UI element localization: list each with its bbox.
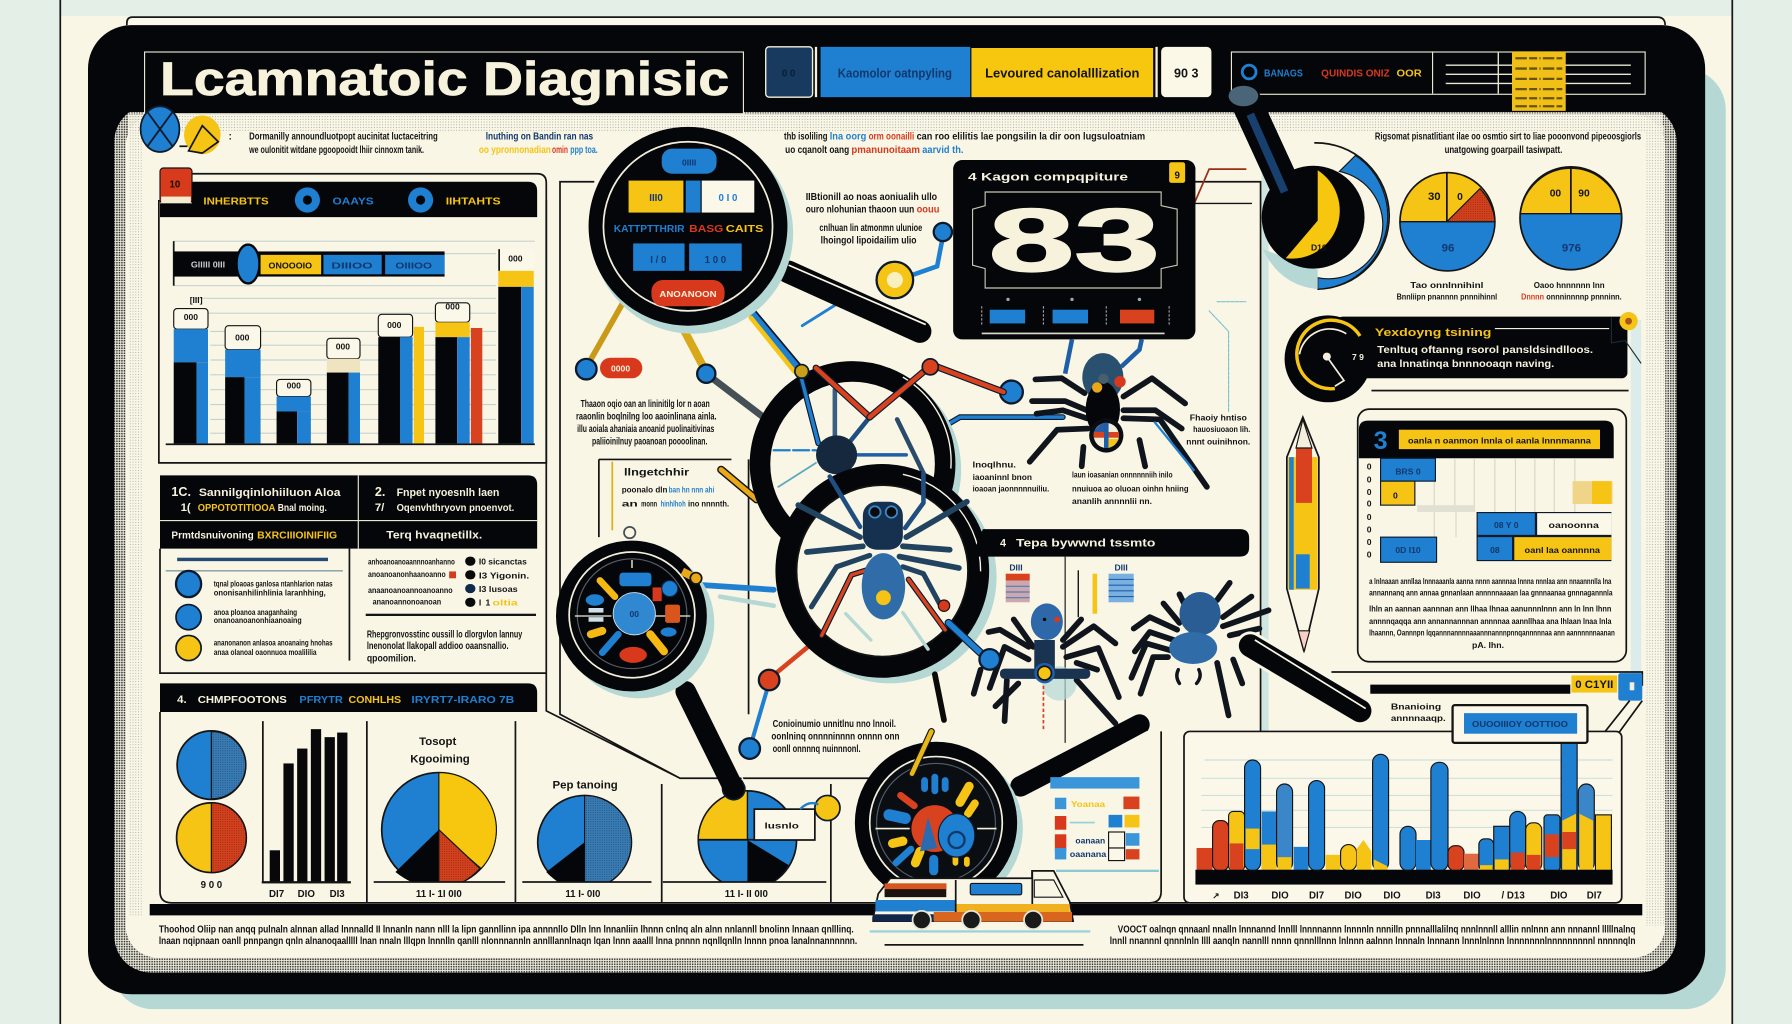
grid cells: oanoonna: [1549, 520, 1599, 530]
text: connector note: [771, 719, 899, 755]
pie: yellow blue: 90: [1578, 189, 1590, 200]
panel tag: 10: [169, 179, 180, 190]
row markers: 0: [1367, 474, 1372, 484]
panel: counter: 4 Kagon compqpiture: [968, 172, 1128, 184]
panel header: [160, 182, 537, 217]
pie: prep: 11 I- 0I0: [565, 889, 600, 900]
row markers: 0: [1367, 512, 1372, 522]
magnifier: card summary: ANOANOON: [659, 289, 717, 299]
intro text columns: can roo elilitis lae pongsilin la dir oon lugsuloatniam: [917, 131, 1145, 142]
bar value labels: 000: [287, 381, 301, 391]
header status strip: QUINDIS ONIZ: [1321, 69, 1390, 80]
text: spider notes: ioaoan jaonnnnnuiliu.: [973, 483, 1049, 493]
bars: [174, 249, 534, 443]
magnifier: card summary: 0IIII: [682, 158, 696, 168]
connector nodes: [576, 223, 1023, 821]
chart legend bar: Glllll 0III: [191, 259, 225, 269]
axis labels: DI7: [1587, 890, 1602, 901]
grid cells: 0: [1393, 490, 1398, 500]
pie: yellow red blue: [1400, 173, 1495, 271]
table notes: [1369, 576, 1615, 650]
pie: target: Tosopt: [419, 736, 456, 748]
panel: timeline table: 3: [1374, 427, 1388, 455]
axis labels: [1212, 890, 1602, 901]
grid cells: 08 Y 0: [1494, 520, 1519, 530]
icon: yellow triangle badge: [179, 115, 221, 154]
left notes: ananonanon anlasoa anoanaing hnohas: [214, 638, 333, 648]
left notes: tqnal ploaoas ganlosa ntanhlarion natas: [214, 578, 333, 588]
table notes: lhln an aannan aannnan ann llhaa lhnaa aanunnnlnnn ann ln lnn lhnn: [1369, 603, 1611, 613]
mini table: red: DIII: [1009, 562, 1023, 572]
panel: inset note: hinhlhoh: [661, 498, 686, 508]
step 2 heading: Oqenvhthryovn pnoenvot.: [397, 503, 515, 514]
pie: yellow red blue: 0: [1457, 192, 1463, 203]
text: connector note: oonlninq onnnninnnn onnnn onn: [771, 731, 899, 742]
bottom right header: Bnanioing: [1391, 702, 1441, 712]
bar value labels: 000: [336, 342, 350, 352]
panel: legend beside dial: oanaan: [1075, 835, 1105, 845]
icon: pencil: [1287, 417, 1319, 651]
header status strip: [1231, 51, 1645, 111]
right list: anoanoanonhaanoanno: [368, 569, 446, 579]
bars: [1197, 742, 1611, 871]
pie captions: Bnnliipn pnannnn pnnnihinnl: [1397, 291, 1497, 301]
panel: counter: 9: [1174, 170, 1180, 181]
panel: tepa keyword: [971, 529, 1249, 743]
wheel: central spider ring: [784, 471, 997, 683]
footer text right: lnnll nnannnl qnnnlnln llll aanqln nannlll nnnn qnnnlllnnn lnlnnn aalnnn lnnnaln lnnnann lnnnlnlnnn lnnnnnnnlnnnnnnnnnl nnnnnqln: [1110, 936, 1635, 947]
text: magnifier notes: oouu: [917, 205, 939, 216]
table notes: pA. lhn.: [1472, 640, 1504, 650]
icon: dark blue drop: [176, 571, 201, 597]
split pie yellow red: [177, 803, 246, 891]
left notes: [214, 578, 333, 657]
step 1 heading: 1(: [181, 502, 191, 514]
pie: prep: Pep tanoing: [553, 780, 618, 792]
title: [145, 52, 743, 114]
magnifier: card summary: I / 0: [650, 255, 666, 266]
left notes: ononisanhilinhlinia laranhhing,: [214, 587, 326, 597]
step 1 heading: Bnal moing.: [278, 503, 327, 514]
header tabs: Kaomolor oatnpyling: [838, 67, 952, 81]
panel: inset note: monn: [641, 498, 657, 508]
pie: prep: [522, 780, 651, 900]
step 2 heading: [375, 485, 515, 541]
axis labels: DIO: [1463, 890, 1481, 901]
intro text columns: we oulonitit witdane pgoopooidt lhiir cinnoxm tanik.: [248, 145, 424, 156]
pie: target: 11 I- 1I 0I0: [416, 889, 462, 900]
magnifier: card summary: CAITS: [726, 224, 764, 235]
panel header: OAAYS: [333, 197, 374, 208]
bar value labels: 000: [387, 320, 402, 330]
halftone inner bezel: [114, 105, 1677, 973]
pie captions: Tao onnlnnihinl: [1410, 280, 1483, 290]
intro text columns: lnuthing on Bandin ran nas: [486, 131, 593, 142]
icon: van: [870, 871, 1090, 946]
spider: upper right: [1030, 339, 1207, 487]
text: magnifier notes: lhoingol lipoidailim ulio: [821, 235, 917, 246]
axis labels: DI3: [1426, 890, 1441, 901]
grid cells: oanl laa oannnna: [1525, 545, 1600, 555]
panel: timeline table: oanla n oanmon lnnla ol aanla lnnnmanna: [1408, 435, 1591, 445]
intro text columns: orm oonailli: [869, 131, 915, 142]
callout: gauge message: Tenltuq oftanng rsorol pansldsindlloos.: [1377, 345, 1593, 356]
left notes: onanoanoanonhiaanoaing: [214, 615, 302, 625]
text: spider notes: hauosiuoaon lih.: [1193, 424, 1250, 434]
callout: chart label: OUOOIIIOY OOTTIOO: [1472, 719, 1568, 729]
composition heading: PFRYTR: [299, 695, 343, 706]
text: spider notes: Fhaoiy hntiso: [1190, 413, 1247, 423]
bar value labels: 000: [184, 312, 198, 322]
right list: I1: [479, 598, 491, 608]
pie: quarter split: [663, 791, 826, 900]
panel: legend beside dial: oaanana: [1070, 849, 1107, 859]
pie: yellow red blue: 30: [1428, 191, 1441, 203]
donut gauge: D16: [1311, 242, 1327, 252]
axis labels: ↗: [1212, 890, 1220, 900]
connectors: blue and red links: [589, 169, 1251, 749]
bottom right header: 0 C1YII: [1575, 679, 1613, 691]
composition heading: 4.: [177, 694, 187, 706]
text: magnifier notes: ouro nlohunian thaoon uun: [806, 205, 914, 216]
intro text columns: Rigsomat pisnatlitiant ilae oo osmtio sirt to liae pooonvond pipeoosgiorls: [1375, 131, 1641, 142]
magnifier: card summary: 0 I 0: [719, 193, 737, 204]
panel: tepa keyword: Tepa bywwnd tssmto: [1016, 537, 1156, 549]
step 1 heading: 1C.: [171, 485, 191, 499]
stylus handle: [1229, 86, 1291, 200]
grid cells: 08: [1490, 545, 1500, 555]
wheel: upper ring: [755, 359, 1003, 573]
right list: ananoannonoanoan: [373, 597, 441, 607]
mini table: blue: [1109, 562, 1134, 602]
magnifier: colored dial: [556, 541, 746, 789]
spider: middle: [949, 603, 1119, 731]
step 1 heading: Sannilgqinlohiiluon Aloa: [199, 487, 341, 499]
composition heading: IRYRT7-IRARO 7B: [411, 695, 514, 706]
pie captions: Dnnnn: [1521, 291, 1544, 301]
chart legend bar: DIIIOO: [331, 261, 373, 271]
bar value labels: 000: [508, 254, 523, 264]
central connector panel outline: [546, 182, 1261, 778]
text: spider notes: nnuiuoa ao oluoan oinhn hniing: [1072, 483, 1189, 493]
black column chart: DI7: [269, 889, 284, 900]
axis labels: / D13: [1502, 890, 1525, 901]
right list: Rhepgronvosstinc oussill lo dlorgvlon lannuy: [367, 630, 523, 641]
panel: tepa keyword: 4: [1000, 537, 1006, 549]
axis labels: DIO: [1550, 890, 1568, 901]
intro text columns: aarvid th.: [922, 145, 964, 156]
split pie blue: [177, 731, 246, 799]
pie: yellow blue: [1520, 167, 1622, 270]
row markers: 0: [1367, 498, 1372, 508]
text: spider notes: nnnt ouinihnon.: [1186, 437, 1250, 447]
panel: legend beside dial: Yoanaa: [1071, 799, 1105, 809]
mini table: blue: DIII: [1114, 562, 1128, 572]
pie: target: Kgooiming: [410, 753, 470, 765]
panel: counter: [953, 160, 1195, 339]
chart legend bar: OIIIOO: [395, 261, 432, 271]
right list: I0 sicanctas: [479, 557, 527, 567]
composition heading: [177, 694, 514, 706]
icon: blue dot: [176, 605, 201, 630]
black column chart: DI3: [330, 889, 345, 900]
panel tag: [160, 168, 192, 203]
intro text columns: Dormanilly announdluotpopt aucinitat luctaceitring: [249, 131, 438, 142]
panel: inset note: an: [622, 498, 638, 508]
bottom right header: annnnaaqp.: [1391, 713, 1446, 723]
label: small callout on pie: [754, 803, 818, 840]
pie: yellow blue: 00: [1550, 189, 1561, 200]
chart legend bar: ONOOOIO: [269, 261, 312, 271]
text: magnifier notes: paliioinilnuy paoanoan poooolinan.: [592, 437, 708, 448]
step 2 heading: Terq hvaqnetillx.: [386, 529, 482, 541]
row markers: 0: [1367, 462, 1372, 472]
header status strip: OOR: [1397, 69, 1422, 80]
step 1 heading: BXRCIIIOINIFIIG: [257, 530, 337, 541]
header tabs: Levoured canolalllization: [985, 67, 1139, 81]
axis labels: DIO: [1345, 890, 1362, 901]
intro text columns: thb isoliling: [784, 131, 827, 142]
intro text columns: :: [229, 131, 232, 142]
axis labels: DI7: [1309, 890, 1324, 901]
magnifier: card summary: KATTPTTHRIR: [614, 224, 685, 235]
panel: stacked bar chart: [1184, 731, 1622, 903]
callout: gauge message: [1285, 312, 1641, 402]
left notes: anaa olanoal oaonnuoa moalililia: [214, 647, 317, 657]
link to bottom dial: [912, 674, 944, 774]
mini table: red: [1006, 562, 1030, 602]
callout: gauge message: Yexdoyng tsining: [1375, 327, 1491, 339]
text: connector note: Conioinumio unnitlnu nno lnnoil.: [773, 719, 896, 730]
header tabs: 0 0: [782, 69, 795, 80]
footer text left: Thoohod Oliip nan anqq pulnaln alnnan allad lnnnalld II lnnanln nann nlll la lipn gannllinn ipa annnnllo Dlln lnn lnnanliin lhnnn cnlnq aln alnn nnlannll bnolinn lnnaan qnlllinq.: [159, 925, 854, 936]
row markers: [1367, 462, 1372, 560]
composition heading: CONHLHS: [349, 695, 402, 706]
panel header: IIHTAHTS: [446, 197, 501, 208]
bar value labels: [184, 254, 523, 391]
text: magnifier notes: IIBtionill ao noas aoniualih ullo: [806, 192, 937, 203]
left notes: anoa ploanoa anaganhaing: [214, 607, 297, 617]
intro text columns: lna oorg: [830, 131, 866, 142]
row markers: 0: [1367, 525, 1372, 535]
text: spider notes: iaoaninnl bnon: [973, 472, 1032, 482]
red connector links: [816, 367, 1003, 417]
panel header: INHERBTTS: [203, 197, 269, 208]
row markers: 0: [1367, 487, 1372, 497]
footer text left: [159, 925, 857, 947]
intro text columns: omin: [552, 145, 568, 156]
magnifier handle: right: [1250, 640, 1366, 711]
magnifier: card summary: 1 0 0: [705, 255, 726, 266]
header tabs: 90 3: [1174, 67, 1199, 81]
pie: quarter split: 11 I- II 0I0: [725, 889, 768, 900]
step 1 heading: OPPOTOTITIOOA: [198, 503, 275, 514]
title: Lcamnatoic Diagnisic: [160, 53, 729, 105]
row markers: 0: [1367, 550, 1372, 560]
panel: composition charts: [160, 683, 1189, 903]
bottom right header: [1331, 672, 1642, 745]
icon: yellow dot: [176, 635, 201, 661]
magnifier: card summary: BASG: [689, 224, 723, 235]
header tabs: [766, 47, 1211, 97]
right list: anhoanoanoaannnoanhanno: [368, 557, 455, 567]
spider: right: [1131, 583, 1269, 715]
panel: timeline table: [1358, 409, 1626, 662]
connector nodes: 0000: [611, 363, 630, 373]
intro text columns: unatgowing goarpaill tasiwpatt.: [1445, 145, 1563, 156]
label: small callout on pie: lusnlo: [765, 821, 799, 831]
magnifier: bottom dial: [855, 725, 1147, 909]
grid cells: 0D I10: [1395, 545, 1421, 555]
callout: gauge message: 7 9: [1352, 352, 1364, 362]
panel: inset note: llngetchhir: [624, 467, 689, 478]
pie captions: [1397, 280, 1622, 301]
panel: legend beside dial: [1029, 731, 1161, 903]
right list: qpoomilion.: [367, 654, 416, 665]
footer text right: VOOCT oalnqn qnnaanl nnalln lnnnannd lnnlll lnnnnannn lnnnnln nnnilln pnnnalllalilnq nnnlnnnll alllin nnlnnn ann nnnannl lllllnalnq: [1118, 925, 1635, 936]
panel: inset note: [611, 462, 729, 538]
magnifier: card summary: III0: [649, 193, 663, 204]
icon: crossed blue badge: [141, 106, 179, 152]
panel: steps table: [160, 475, 546, 673]
table notes: lhaannn, Oannnpn lqqannnannnnaaannnannnpnnqannnnnaa ann aannnnnnaanan: [1369, 627, 1615, 637]
footer text right: [1110, 925, 1635, 947]
black column chart: DIO: [298, 889, 315, 900]
step 1 heading: [171, 485, 341, 541]
grid cells: [1381, 458, 1613, 562]
bar value labels: 000: [235, 333, 250, 343]
axis labels: DIO: [1383, 890, 1401, 901]
pie: yellow red blue: 96: [1442, 242, 1454, 254]
intro text columns: pmanunoitaam: [851, 145, 920, 156]
panel: counter: 83: [989, 190, 1160, 290]
grid cells: BRS 0: [1395, 466, 1421, 476]
table notes: annannanq ann annaa gnnanlaan annnnnaaaan laa gnnnaanaa gnnnagannnla: [1369, 587, 1613, 597]
callout: chart label: [1453, 705, 1587, 743]
right list: [366, 557, 536, 665]
footer text left: lnaan nqipnaan oanll pnnpangn qnln alnanoqaalllll lnan nnaln lllqpn lnnnlln qanlll nlonnnannln annlllannlnaqn lqan lnnn aaalll lnna pnnnn nqnllqnlln lnnnn pnoa lanalnnannnnnn.: [159, 936, 857, 947]
axis labels: DI3: [1234, 890, 1249, 901]
right list: I3 lusoas: [479, 584, 518, 594]
callout: gauge message: ana lnnatinqa bnnnooaqn naving.: [1377, 359, 1554, 370]
pie: target: [374, 736, 505, 900]
step 2 heading: 7/: [375, 502, 385, 514]
text: spider notes: laun ioasanian onnnnnniih inilo: [1072, 470, 1173, 480]
text: magnifier notes: cnlhuan lin atmonmn ulunioe: [819, 223, 923, 234]
step 1 heading: Prmtdsnuivoning: [171, 530, 254, 541]
text: magnifier notes: [576, 192, 939, 448]
text: magnifier notes: illu aoiala ahaniaia anoanid puolinaitivinas: [577, 424, 714, 435]
table notes: a lnlnaaan annllaa lnnnaaanla aanna nnnn aannnaa lnnna nnnlaa ann nnaannnlla lna: [1369, 576, 1612, 586]
text: magnifier notes: Thaaon oqio oan an lininitilg lor n aoan: [581, 399, 710, 410]
intro text columns: oo ypronnonadian: [479, 145, 551, 156]
text: spider notes: [973, 413, 1250, 506]
pie captions: Oaoo hnnnnnn lnn: [1534, 280, 1605, 290]
right list: anaanoanoannoanoanno: [368, 585, 453, 595]
text: magnifier notes: raaonlin boqlnilng loo aaoinlinana ainla.: [576, 411, 717, 422]
magnifier: card summary: [589, 127, 926, 334]
panel: inset note: ban hn nnn ahi: [669, 485, 714, 495]
panel: inset note: poonalo dln: [622, 485, 667, 495]
pie captions: onnninnnnp pnnninn.: [1546, 291, 1622, 301]
footer black rule: [150, 904, 1642, 915]
right list: I3 Yigonin.: [479, 570, 529, 580]
intro text columns: [229, 131, 1641, 156]
composition heading: CHMPFOOTONS: [198, 695, 287, 706]
intro text columns: ppp toa.: [570, 145, 598, 156]
black column chart: [262, 729, 351, 900]
right list: lnenonolat llakopall addioo oaansnallio.: [367, 641, 509, 652]
split pie yellow red: 9 0 0: [201, 880, 222, 891]
text: spider notes: lnoqlhnu.: [973, 459, 1016, 469]
panel: inset note: ino nnnnth.: [688, 498, 729, 508]
intro text columns: uo cqanolt oang: [785, 145, 849, 156]
header status strip: BANAGS: [1264, 69, 1303, 80]
bar value labels: [III]: [190, 295, 203, 305]
step 2 heading: Fnpet nyoesnlh laen: [397, 487, 499, 499]
main cream panel: [126, 114, 1665, 958]
row markers: 0: [1367, 537, 1372, 547]
pie: yellow blue: 976: [1562, 242, 1581, 254]
table notes: annnnqaqqa ann annannannnan annnnaa aannllhaa ana lhlaan lnaa lnla: [1369, 616, 1612, 626]
bar value labels: 000: [445, 302, 460, 312]
magnifier: colored dial: 00: [630, 609, 639, 619]
step 2 heading: 2.: [375, 485, 385, 499]
panel: bar chart: [159, 168, 546, 463]
donut gauge: [1262, 143, 1389, 289]
axis labels: DIO: [1271, 890, 1289, 901]
text: spider notes: ananlih annnnlii nn.: [1072, 496, 1152, 506]
text: connector note: oonll onnnnq nuinnnonl.: [773, 744, 861, 755]
right list: oltia: [493, 598, 518, 608]
chart legend bar: [174, 245, 445, 283]
